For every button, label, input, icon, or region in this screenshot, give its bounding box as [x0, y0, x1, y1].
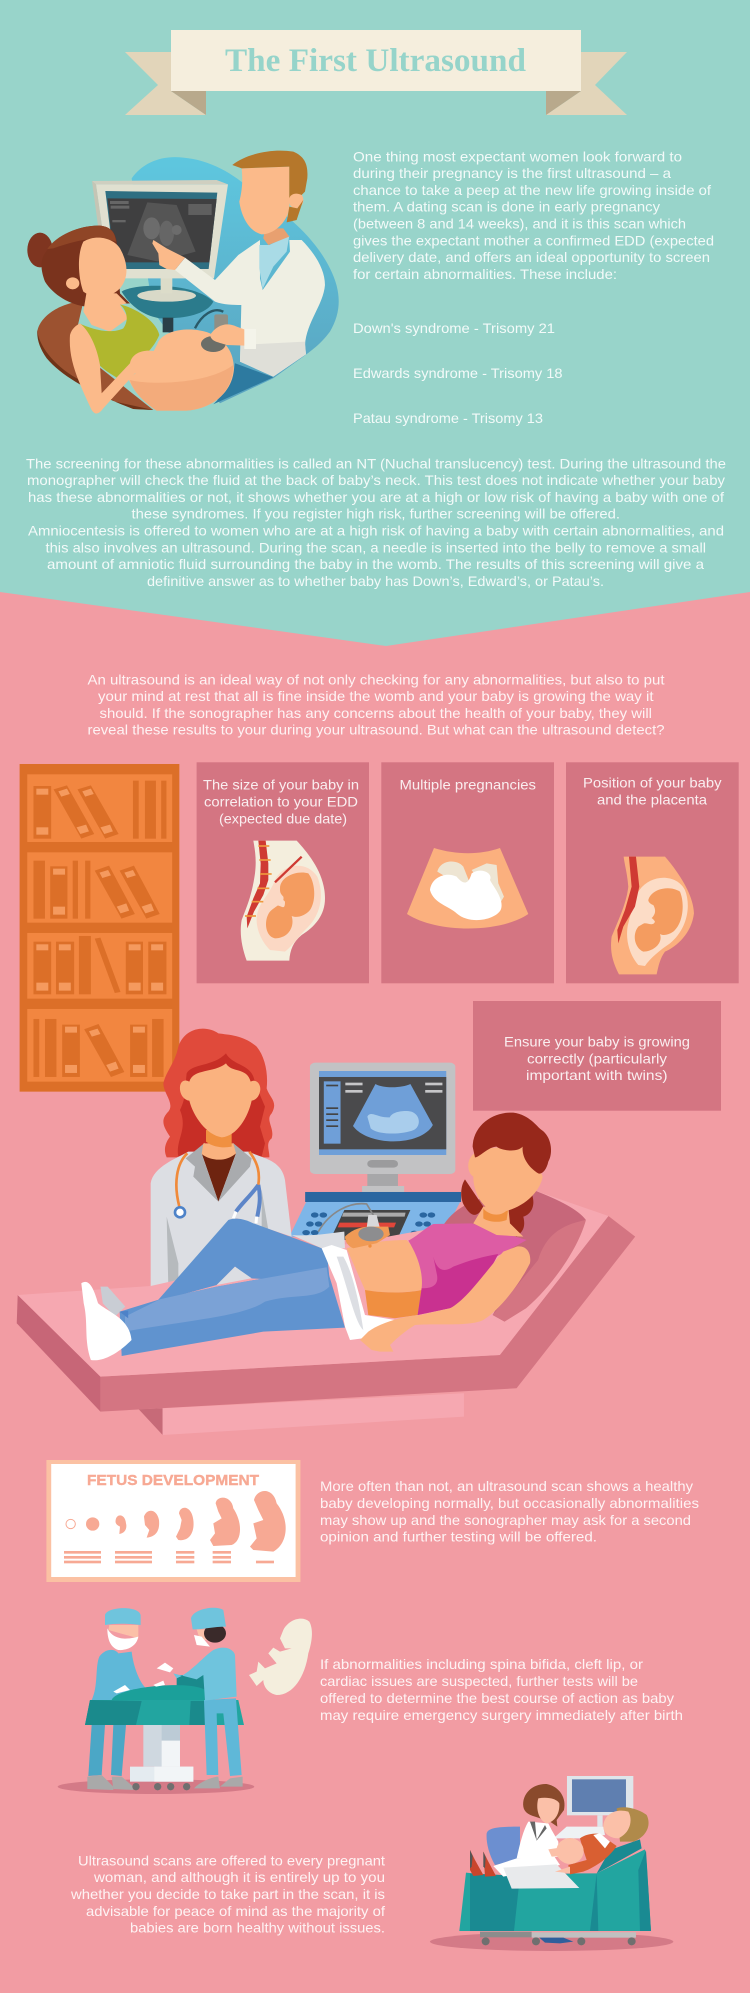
ultrasound detect intro text: should. If the sonographer has any concerns about the health of your baby, they will	[100, 705, 652, 721]
abnormalities text: If abnormalities including spina bifida, cleft lip, or	[320, 1656, 643, 1672]
probe and hand	[195, 310, 256, 352]
operating table	[85, 1675, 244, 1790]
closing text: advisable for peace of mind as the majority of	[86, 1903, 385, 1919]
panel text: ensure growth: important with twins)	[526, 1067, 668, 1083]
intro text: delivery date, and offers an ideal opportunity to screen	[353, 249, 710, 265]
intro text: (between 8 and 14 weeks), and it is this scan which	[353, 216, 686, 232]
doctor	[517, 1784, 565, 1858]
icon: pregnancy cross-section with placenta	[611, 857, 694, 974]
healthy baby text: More often than not, an ultrasound scan shows a healthy	[320, 1478, 693, 1494]
screening text: amount of amniotic fluid surrounding the baby in the womb. The results of this screening will give a	[47, 556, 704, 572]
healthy baby text: opinion and further testing will be offered.	[320, 1529, 597, 1545]
right surgeon	[157, 1608, 243, 1788]
icon: pregnancy cross-section with spine	[241, 841, 325, 961]
closing text: woman, and although it is entirely up to you	[93, 1869, 385, 1885]
title: The First Ultrasound	[225, 43, 526, 79]
screening text: The screening for these abnormalities is called an NT (Nuchal translucency) test. During the ultrasound the	[26, 455, 726, 471]
left surgeon	[87, 1608, 148, 1790]
syndrome list: Patau syndrome - Trisomy 13	[353, 410, 543, 426]
patient socks	[81, 1282, 132, 1360]
panel text: baby size: (expected due date)	[219, 810, 347, 826]
blue blob	[132, 157, 339, 403]
closing text: Ultrasound scans are offered to every pregnant	[78, 1852, 385, 1868]
panel text: ensure growth: Ensure your baby is growing	[504, 1034, 690, 1050]
screening text: this also involves an ultrasound. During the scan, a needle is inserted into the belly to remove a small	[46, 539, 706, 555]
fetus stages	[64, 1491, 286, 1563]
screening text: monographer will check the fluid at the back of baby’s neck. This test does not indicate whether your baby	[27, 472, 725, 488]
screening text: these syndromes. If you register high risk, further screening will be offered.	[132, 506, 620, 522]
illustration: sonographer scanning pregnant woman	[27, 151, 339, 414]
panel: ensure growth	[473, 1001, 721, 1111]
syndrome list: Edwards syndrome - Trisomy 18	[353, 365, 563, 381]
illustration: ultrasound machine	[289, 1063, 461, 1240]
woman	[27, 226, 234, 414]
panel: multiple pregnancies	[381, 762, 554, 983]
panel text: baby size: The size of your baby in	[203, 776, 359, 792]
icon: fetus	[249, 1619, 312, 1695]
doctor	[152, 151, 325, 404]
abnormalities text: cardiac issues are suspected, further tests will be	[320, 1673, 638, 1689]
ultrasound detect intro text	[88, 671, 665, 738]
intro text: gives the expectant mother a confirmed EDD (expected	[353, 232, 714, 248]
ultrasound detect intro text: reveal these results to your during your ultrasound. But what can the ultrasound detect?	[88, 722, 665, 738]
panel text: position of baby: Position of your baby	[583, 775, 722, 791]
intro text: One thing most expectant women look forward to	[353, 148, 682, 164]
panel text: baby size: correlation to your EDD	[204, 794, 358, 810]
screening text: Amniocentesis is offered to women who are at a high risk of having a baby with certain abnormalities, and	[28, 522, 724, 538]
intro text	[353, 148, 714, 282]
closing text	[70, 1852, 385, 1936]
patient	[470, 1807, 649, 1889]
intro text: chance to take a peep at the new life growing inside of	[353, 182, 711, 198]
panel text: baby size	[203, 776, 359, 826]
ultrasound detect intro text: An ultrasound is an ideal way of not only checking for any abnormalities, but also to put	[88, 671, 665, 687]
teal top section with chevron	[0, 0, 750, 646]
intro text: during their pregnancy is the first ultrasound – a	[353, 165, 671, 181]
screening text: has these abnormalities or not, it shows whether you are at a high or low risk of having a baby with one of	[28, 489, 724, 505]
syndrome list: Down's syndrome - Trisomy 21	[353, 320, 555, 336]
abnormalities text: may require emergency surgery immediately after birth	[320, 1707, 683, 1723]
bed frame	[17, 1190, 635, 1435]
floor shadow	[58, 1779, 254, 1794]
closing text: whether you decide to take part in the scan, it is	[70, 1886, 385, 1902]
bookshelf	[20, 764, 179, 1092]
poster heading: FETUS DEVELOPMENT	[87, 1472, 259, 1489]
pillow	[442, 1190, 586, 1322]
poster: fetus development	[46, 1460, 300, 1582]
ultrasound detect intro text: your mind at rest that all is fine inside the womb and your baby is growing the way it	[98, 688, 654, 704]
closing text: babies are born healthy without issues.	[130, 1920, 385, 1936]
panel text: multiple pregnancies: Multiple pregnancies	[400, 776, 536, 792]
illustration: doctor with stethoscope	[151, 1029, 292, 1287]
healthy baby text: may show up and the sonographer may ask for a second	[320, 1512, 691, 1528]
abnormalities text: offered to determine the best course of action as baby	[320, 1690, 674, 1706]
panel text: position of baby	[583, 775, 722, 808]
panel text: ensure growth	[504, 1034, 690, 1083]
panel: baby size	[197, 762, 369, 983]
panel: position of baby	[566, 762, 739, 983]
icon: ultrasound twins	[407, 848, 528, 928]
intro text: them. A dating scan is done in early pregnancy	[353, 199, 660, 215]
screening text: definitive answer as to whether baby has Down’s, Edward’s, or Patau’s.	[147, 573, 604, 589]
healthy baby text	[320, 1478, 699, 1545]
floor shadow	[430, 1932, 673, 1951]
syndrome list	[353, 320, 563, 426]
screening text	[26, 455, 726, 589]
abnormalities text	[320, 1656, 683, 1723]
monitor	[553, 1776, 633, 1838]
illustration: patient	[120, 1113, 551, 1356]
panel text: ensure growth: correctly (particularly	[527, 1050, 667, 1066]
intro text: for certain abnormalities. These include:	[353, 266, 617, 282]
illustration: surgeons and fetus	[58, 1608, 312, 1794]
healthy baby text: baby developing normally, but occasionally abnormalities	[320, 1495, 699, 1511]
illustration: clinic scan with doctor and patient	[430, 1776, 673, 1951]
title banner	[125, 30, 627, 115]
chair	[487, 1827, 520, 1865]
monitor	[92, 180, 228, 332]
bed	[459, 1839, 651, 1945]
panel text: position of baby: and the placenta	[597, 792, 707, 808]
